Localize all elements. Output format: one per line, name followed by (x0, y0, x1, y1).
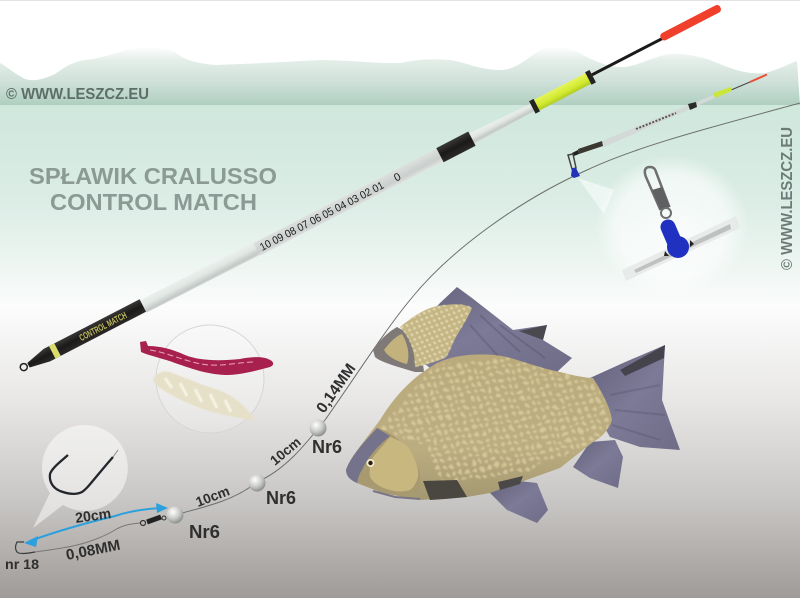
small float: clear body (602, 95, 715, 147)
small carp: fins and back (400, 287, 572, 372)
leader line with hook (16, 523, 140, 554)
title (29, 163, 277, 215)
large carp: tail (590, 345, 680, 450)
line and shot labels (5, 361, 359, 572)
line and shot labels: nr 18 (5, 556, 39, 572)
large float: scale markings: 0 (392, 171, 403, 184)
red bloodworm (140, 341, 273, 375)
hook (50, 455, 113, 494)
small float: blue adapter (571, 168, 580, 178)
small full float (568, 74, 767, 178)
line and shot labels: Nr6 (266, 488, 296, 508)
large carp: scale texture (378, 357, 610, 485)
large float: yellow sleeve (529, 70, 596, 114)
small float: black parts (688, 102, 697, 110)
line and shot labels: 10cm (267, 434, 304, 468)
large float illustration (17, 1, 725, 378)
line and shot labels: Nr6 (189, 522, 220, 542)
line and shot labels: Nr6 (312, 437, 342, 457)
line and shot labels: 20cm (74, 506, 112, 527)
large float: red tip (659, 4, 722, 42)
large carp: eye (366, 459, 374, 467)
large carp: ventral fin (490, 480, 548, 523)
hills on the horizon (0, 47, 800, 105)
large float: black base with label (17, 299, 146, 375)
large float: black base with label: CONTROL MATCH (78, 310, 129, 344)
large float: clear body upper (469, 101, 537, 144)
large carp: anal fin (573, 440, 623, 488)
title: CONTROL MATCH (50, 189, 257, 215)
bubble: bait (140, 325, 273, 433)
large carp: head (346, 428, 420, 499)
small crucian carp (373, 287, 572, 372)
small carp: head (373, 327, 424, 372)
large float: scale band (254, 149, 443, 256)
main fishing line (182, 103, 800, 513)
large float: black stem (591, 37, 663, 76)
small float: swivel (568, 154, 576, 169)
large crucian carp (346, 345, 680, 523)
watermark: top left: © WWW.LESZCZ.EU (6, 86, 149, 103)
large float: clear body lower (140, 147, 443, 314)
bubble: hook detail (33, 425, 128, 528)
title: SPŁAWIK CRALUSSO (29, 163, 277, 189)
t-bar (622, 216, 740, 281)
small carp: scales (400, 304, 472, 367)
snap clip (645, 167, 669, 209)
blue stopper (664, 227, 694, 258)
lead shot: three balls (166, 420, 326, 524)
line and shot labels: 0,14MM (313, 361, 359, 416)
white maggot (153, 371, 255, 420)
large float: black sleeve (436, 132, 476, 162)
large float: scale markings: 10 09 08 07 06 05 04 03 02 01 (258, 180, 386, 254)
swivel (140, 516, 166, 526)
line and shot labels: 0,08MM (65, 537, 122, 564)
watermark: right vertical: © WWW.LESZCZ.EU (779, 127, 796, 270)
bubble: adapter detail (578, 155, 749, 297)
small float: red tip (750, 74, 767, 82)
blue 20cm arrow (24, 503, 168, 547)
large carp: pectoral fin (423, 480, 467, 500)
small float: yellow sleeve (713, 87, 732, 98)
large carp: body (346, 354, 612, 500)
line and shot labels: 10cm (194, 483, 232, 510)
